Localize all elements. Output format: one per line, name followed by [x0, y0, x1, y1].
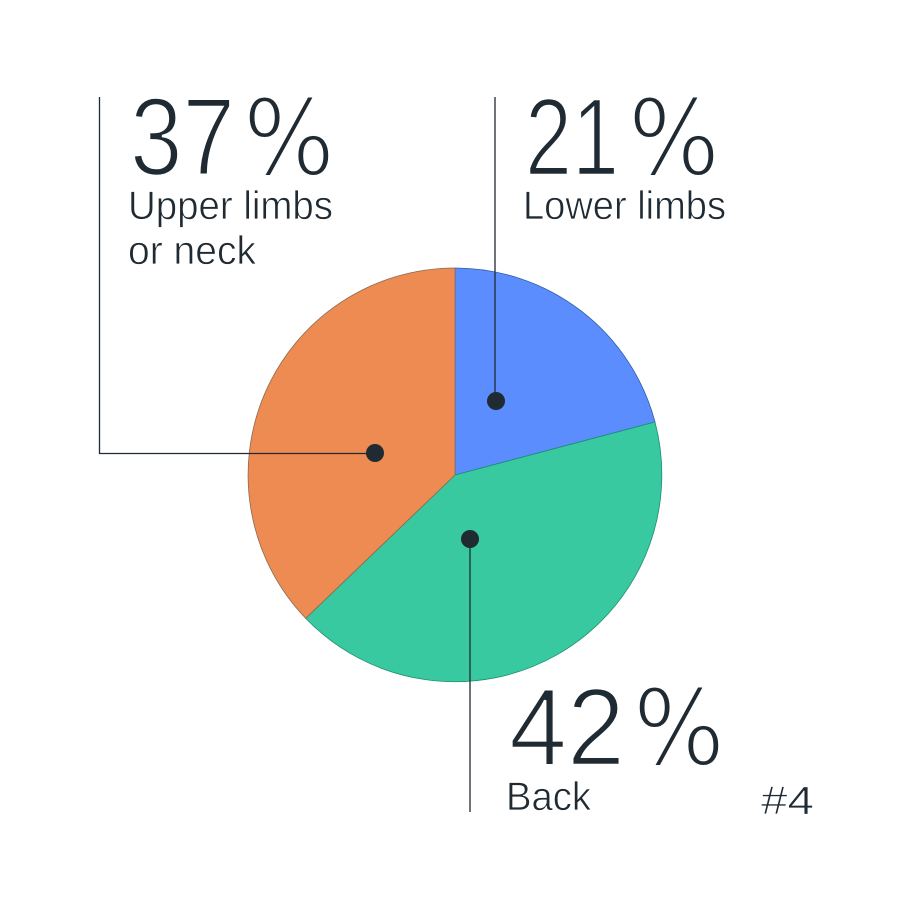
label: back: Back	[506, 775, 592, 819]
callout: lower limbs	[487, 76, 726, 410]
leader line: back	[469, 539, 471, 812]
value: 21%	[525, 76, 720, 200]
figure number: #4	[761, 779, 814, 823]
label: upper limbs or neck	[128, 184, 333, 273]
label: upper limbs or neck: Upper limbs	[128, 184, 333, 228]
pie slice: upper limbs or neck 37%	[248, 268, 455, 618]
marker dot: back	[461, 530, 479, 548]
marker dot: upper limbs	[366, 444, 384, 462]
leader line: upper limbs	[100, 97, 375, 454]
value: 42%: %	[633, 667, 725, 790]
label: upper limbs or neck: or neck	[128, 229, 257, 273]
leader line: lower limbs	[494, 97, 496, 400]
callout: back	[461, 530, 725, 819]
callout: upper limbs or neck	[100, 76, 384, 462]
value: 21%: 21	[525, 76, 619, 199]
value: 37%: %	[243, 77, 335, 200]
value: 21%: %	[628, 77, 720, 200]
label: lower limbs: Lower limbs	[523, 184, 726, 228]
value: 42%: 42	[509, 666, 625, 789]
value: 37%: 37	[130, 76, 235, 199]
value: 37%	[130, 76, 335, 200]
marker dot: lower limbs	[487, 392, 505, 410]
pie slice: lower limbs 21%	[455, 268, 655, 475]
pie slice: back 42%	[306, 422, 662, 682]
pie chart	[248, 268, 662, 682]
value: 42%	[509, 666, 725, 790]
